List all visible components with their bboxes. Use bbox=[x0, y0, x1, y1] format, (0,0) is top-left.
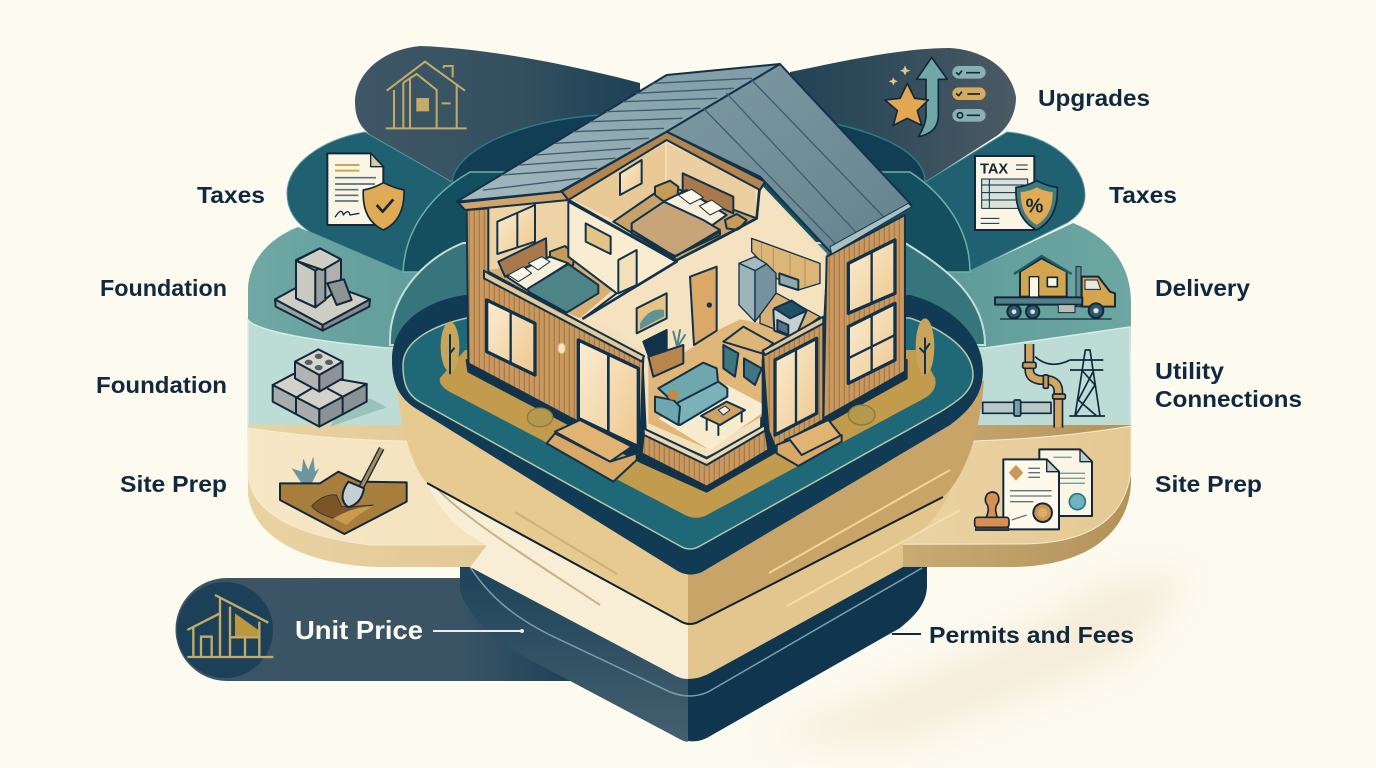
percent sign: % bbox=[1026, 195, 1044, 217]
panel: inner hump taxes bbox=[403, 172, 970, 272]
icon: document with shield bbox=[327, 153, 404, 230]
icon: tax document with percent shield bbox=[975, 156, 1057, 230]
label: site prep left: Site Prep bbox=[120, 471, 227, 497]
panel: taxes band bbox=[287, 132, 1085, 272]
illustration: house cutaway bbox=[441, 64, 934, 492]
icon: concrete foundation block bbox=[275, 248, 370, 331]
leader line: unit price bbox=[433, 629, 524, 633]
front low wall bbox=[642, 425, 768, 487]
label: upgrades: Upgrades bbox=[1038, 85, 1150, 111]
panel: site prep band bbox=[248, 425, 1131, 567]
panel: inner hump foundation bbox=[390, 243, 985, 345]
side steps bbox=[777, 420, 842, 466]
icon: stacked blocks bbox=[273, 349, 387, 427]
icon: right tree bbox=[916, 318, 934, 375]
roof bbox=[457, 64, 912, 254]
right wood wall bbox=[763, 215, 905, 447]
label: utility connections: Utility bbox=[1155, 358, 1224, 384]
label: taxes left: Taxes bbox=[197, 182, 265, 208]
panel: foundation band bbox=[248, 223, 1131, 352]
icon: unit price house bbox=[177, 582, 273, 678]
label: foundation upper: Foundation bbox=[100, 275, 227, 301]
panel: inner hump upgrades bbox=[452, 115, 925, 182]
icon: top-left house outline bbox=[386, 62, 467, 128]
leader line: permits bbox=[892, 633, 921, 635]
icon: star, arrow and checklist bbox=[885, 57, 986, 137]
bushes bbox=[527, 405, 875, 427]
living room bbox=[643, 330, 762, 450]
icon: permits documents and stamp bbox=[975, 449, 1092, 531]
panel: cream foundation layer bbox=[410, 440, 960, 679]
label: permits and fees: Permits and Fees bbox=[929, 622, 1134, 648]
tax word: TAX bbox=[980, 161, 1008, 177]
icon: left tree bbox=[441, 322, 459, 373]
house base bbox=[467, 360, 907, 492]
interior base bbox=[465, 140, 827, 457]
label: site prep right: Site Prep bbox=[1155, 471, 1262, 497]
label: utility connections bbox=[1155, 358, 1302, 412]
label: delivery: Delivery bbox=[1155, 275, 1250, 301]
panel: tan layer bbox=[392, 345, 984, 625]
label: utility connections: Connections bbox=[1155, 386, 1302, 412]
icon: shovel in soil bbox=[280, 448, 407, 534]
front steps bbox=[547, 420, 637, 482]
label: foundation lower: Foundation bbox=[96, 372, 227, 398]
panel: navy ring bbox=[392, 295, 983, 575]
panel: gold ground bbox=[440, 350, 936, 518]
icon: pipes and power tower bbox=[983, 344, 1105, 428]
panel: teal ground bbox=[403, 318, 973, 549]
label: unit price: Unit Price bbox=[295, 615, 423, 645]
panel: light foundation band bbox=[248, 320, 1131, 440]
fascia trim bbox=[458, 132, 765, 210]
lower main room bbox=[583, 187, 822, 448]
left wood wall bbox=[467, 208, 644, 450]
label: taxes right: Taxes bbox=[1109, 182, 1177, 208]
left bedroom bbox=[488, 200, 617, 318]
panel: dark base layer bbox=[460, 560, 927, 742]
icon: delivery truck bbox=[995, 256, 1115, 319]
middle wall bbox=[568, 202, 677, 318]
dining set bbox=[723, 327, 773, 385]
upper bedroom bbox=[570, 143, 757, 260]
panel: top dark band bbox=[355, 46, 1016, 200]
panel: unit price pill bbox=[175, 578, 580, 681]
soft background shadow bbox=[760, 575, 1190, 745]
